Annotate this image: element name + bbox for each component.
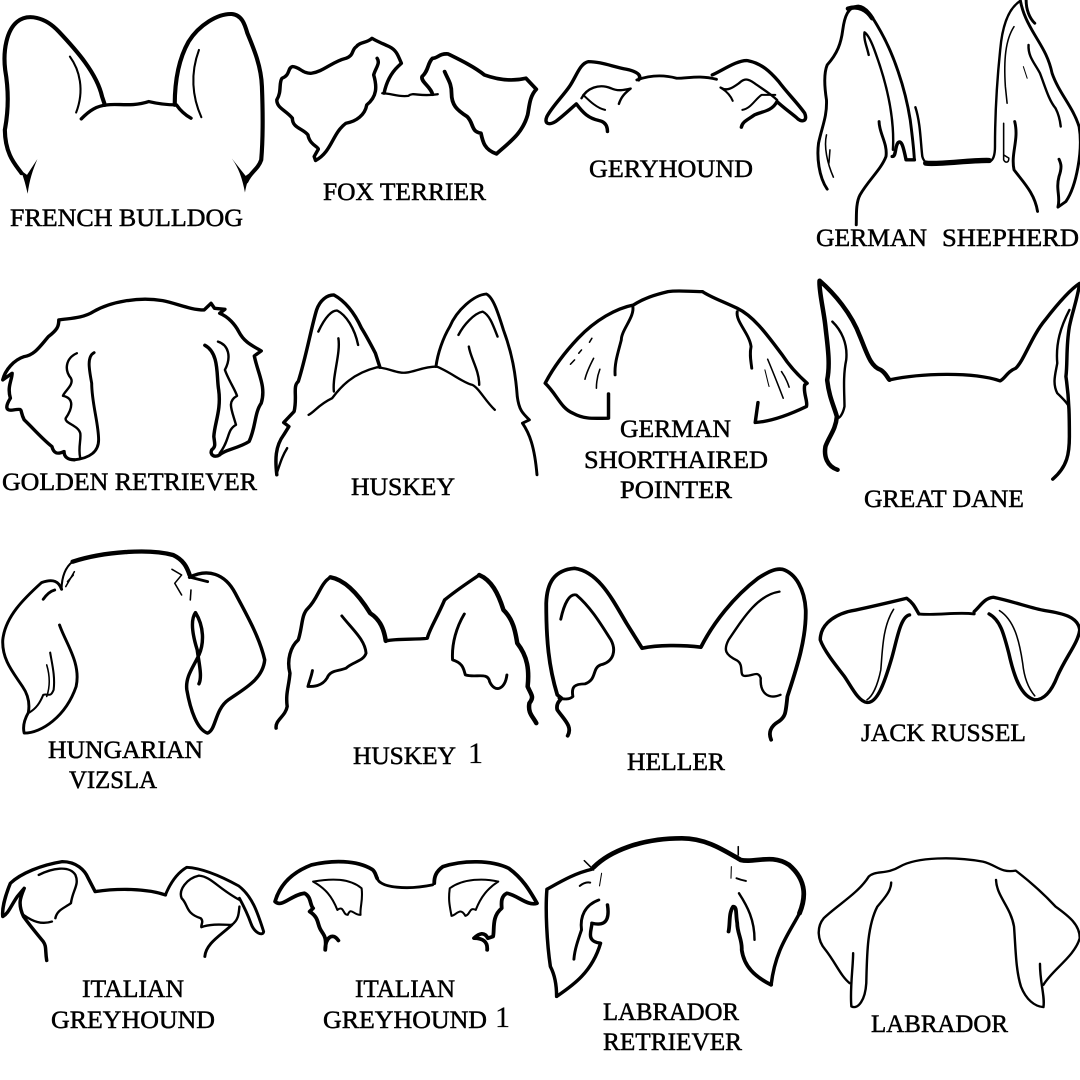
- panel: jack russel: [820, 597, 1080, 747]
- ears: hungarian vizsla: [3, 552, 265, 733]
- panel: italian greyhound: [3, 862, 264, 1034]
- ears: heller: [546, 568, 806, 740]
- label: german shorthaired pointer: GERMAN: [620, 416, 731, 443]
- label: italian greyhound: [51, 976, 215, 1034]
- panel: labrador retriever: [546, 838, 804, 1056]
- ears: labrador retriever: [546, 838, 804, 996]
- label: italian greyhound 1: [323, 976, 510, 1034]
- label: german shepherd: SHEPHERD: [942, 225, 1079, 252]
- label: labrador retriever: LABRADOR: [603, 999, 739, 1026]
- label: italian greyhound: GREYHOUND: [51, 1007, 215, 1034]
- label: fox terrier: FOX TERRIER: [323, 179, 486, 206]
- label: huskey 1: [353, 737, 483, 770]
- ears: french bulldog: [5, 14, 263, 194]
- label: labrador: LABRADOR: [871, 1011, 1008, 1038]
- ears: german shorthaired pointer: [545, 291, 807, 423]
- panel: huskey: [276, 294, 537, 501]
- label: huskey 1: HUSKEY: [353, 743, 456, 770]
- label: hungarian vizsla: VIZSLA: [69, 767, 157, 794]
- label: german shepherd: [816, 225, 1079, 252]
- panel: italian greyhound 1: [275, 862, 537, 1034]
- label: german shepherd: GERMAN: [816, 225, 927, 252]
- ears: golden retriever: [3, 299, 263, 460]
- ears: great dane: [819, 281, 1080, 479]
- label: italian greyhound 1: ITALIAN: [355, 976, 455, 1003]
- panel: fox terrier: [277, 38, 536, 206]
- ears: fox terrier: [277, 38, 536, 161]
- label: greyhound: GERYHOUND: [589, 156, 753, 183]
- ears: italian greyhound: [3, 862, 264, 961]
- ears: huskey 1: [276, 575, 536, 728]
- label: german shorthaired pointer: POINTER: [620, 477, 732, 504]
- panel: greyhound: [546, 61, 806, 183]
- label: huskey 1: 1: [468, 737, 483, 770]
- label: jack russel: JACK RUSSEL: [861, 720, 1026, 747]
- panel: german shorthaired pointer: [545, 291, 807, 504]
- label: italian greyhound: ITALIAN: [82, 976, 184, 1003]
- panel: great dane: [819, 281, 1080, 513]
- panel: huskey 1: [276, 575, 536, 770]
- label: golden retriever: GOLDEN RETRIEVER: [2, 469, 257, 496]
- label: italian greyhound 1: 1: [495, 1001, 510, 1034]
- label: french bulldog: FRENCH BULLDOG: [10, 205, 243, 232]
- panel: heller: [546, 568, 806, 776]
- ears: labrador: [819, 858, 1080, 1007]
- ears: german shepherd: [818, 0, 1080, 225]
- label: hungarian vizsla: HUNGARIAN: [48, 737, 203, 764]
- label: italian greyhound 1: GREYHOUND: [323, 1007, 487, 1034]
- panel: hungarian vizsla: [3, 552, 265, 794]
- panel: golden retriever: [2, 299, 263, 496]
- panel: labrador: [819, 858, 1080, 1038]
- label: labrador retriever: [603, 999, 742, 1056]
- label: german shorthaired pointer: [584, 416, 768, 504]
- label: hungarian vizsla: [48, 737, 203, 794]
- label: german shorthaired pointer: SHORTHAIRED: [584, 447, 768, 474]
- label: huskey: HUSKEY: [351, 474, 455, 501]
- ears: huskey: [276, 294, 537, 475]
- panel: french bulldog: [5, 14, 263, 232]
- ears: greyhound: [546, 61, 806, 132]
- ears: jack russel: [820, 597, 1080, 703]
- panel: german shepherd: [816, 0, 1080, 252]
- ears: italian greyhound 1: [275, 862, 537, 950]
- label: great dane: GREAT DANE: [864, 486, 1024, 513]
- label: labrador retriever: RETRIEVER: [603, 1029, 742, 1056]
- label: heller: HELLER: [627, 749, 725, 776]
